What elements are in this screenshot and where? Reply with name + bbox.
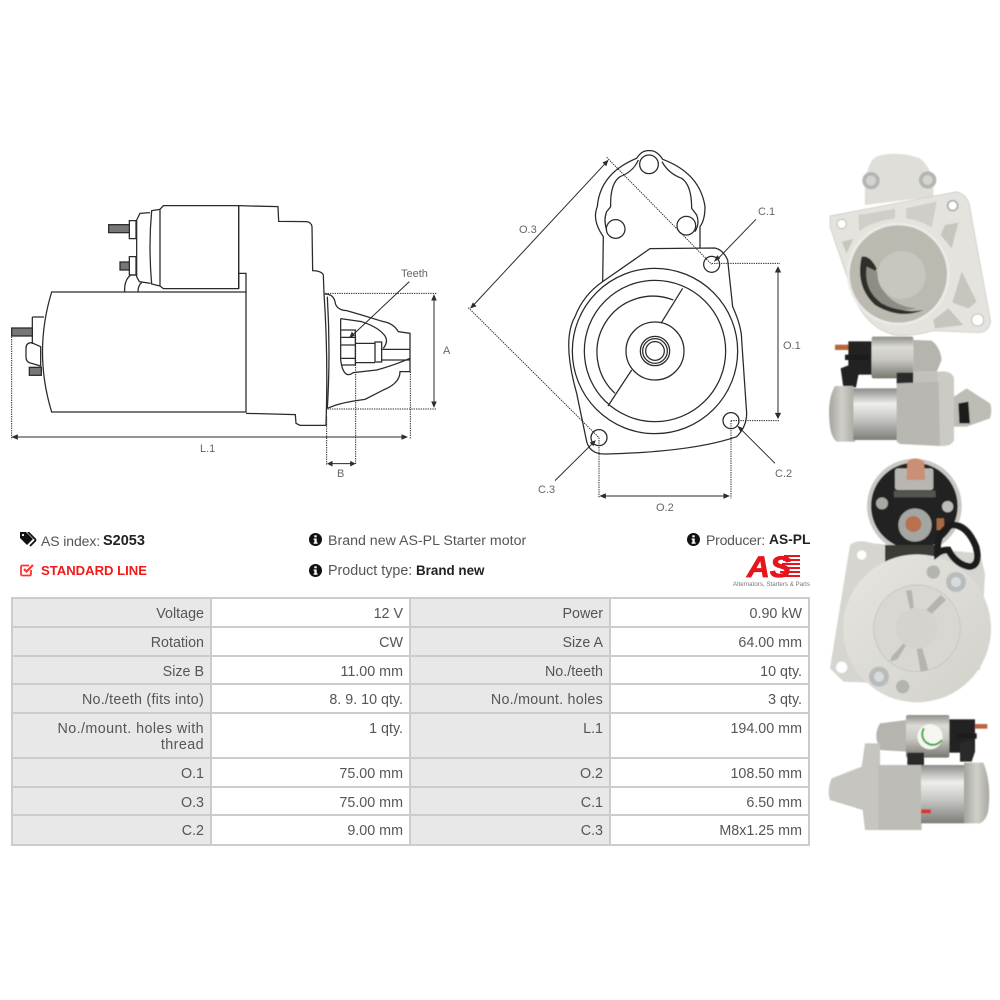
- row: voltage and power: 12 V: [374, 606, 403, 622]
- row: threaded holes and L.1: L.1: [583, 721, 603, 737]
- label: O.2: O.2: [656, 502, 674, 514]
- label: O.3: O.3: [519, 224, 537, 236]
- dimension lines: [468, 157, 780, 498]
- dimension lines: [12, 282, 437, 466]
- label: B: B: [337, 468, 344, 480]
- row: C.2 and C.3: M8x1.25 mm: [719, 823, 802, 839]
- info: AS index: AS index:: [41, 533, 100, 549]
- row: fits into and mounting holes: No./teeth (fits into): [82, 692, 204, 708]
- row: voltage and power: 0.90 kW: [750, 606, 802, 622]
- row: voltage and power: Power: [562, 606, 603, 622]
- row: size B and teeth: No./teeth: [545, 664, 603, 680]
- row: O.3 and C.1: 6.50 mm: [746, 795, 802, 811]
- info: product type: Product type:: [328, 563, 412, 579]
- drive nose: [325, 294, 410, 408]
- mounting flange outline: [569, 151, 747, 454]
- info: product type: [309, 563, 484, 579]
- icon: info: [309, 533, 322, 546]
- row: size B and teeth: [13, 657, 808, 683]
- row: size B and teeth: 10 qty.: [760, 664, 802, 680]
- row: threaded holes and L.1: 194.00 mm: [730, 721, 802, 737]
- row: threaded holes and L.1: [13, 714, 808, 757]
- specification table: [11, 597, 810, 846]
- row: O.1 and O.2: 75.00 mm: [339, 766, 403, 782]
- side view technical drawing: [11, 205, 451, 480]
- row: O.1 and O.2: O.1: [181, 766, 204, 782]
- drive end rings and pinion: [572, 268, 738, 434]
- row: threaded holes and L.1: 1 qty.: [369, 721, 403, 737]
- front view technical drawing: [468, 150, 801, 514]
- row: rotation and size A: 64.00 mm: [738, 635, 802, 651]
- info: product description: Brand new AS-PL Starter motor: [328, 533, 526, 549]
- row: rotation and size A: CW: [379, 635, 403, 651]
- info: product type: Brand new: [416, 563, 484, 578]
- row: C.2 and C.3: C.3: [581, 823, 603, 839]
- row: size B and teeth: Size B: [163, 664, 204, 680]
- icon: red check box: [20, 564, 34, 576]
- label: O.1: O.1: [783, 340, 801, 352]
- info: producer: Producer:: [706, 532, 765, 548]
- row: rotation and size A: [13, 628, 808, 655]
- label: C.2: C.2: [775, 468, 792, 480]
- row: threaded holes and L.1: thread: [161, 737, 204, 753]
- logo: AS: [733, 553, 810, 587]
- row: size B and teeth: 11.00 mm: [340, 664, 403, 680]
- row: O.3 and C.1: 75.00 mm: [339, 795, 403, 811]
- icon: info: [687, 533, 700, 546]
- info: AS index: S2053: [103, 533, 145, 549]
- info: producer: [687, 532, 810, 548]
- row: fits into and mounting holes: No./mount. holes: [491, 692, 603, 708]
- row: fits into and mounting holes: 3 qty.: [768, 692, 802, 708]
- solenoid: [125, 206, 239, 292]
- row: threaded holes and L.1: No./mount. holes with: [57, 721, 204, 737]
- row: O.3 and C.1: C.1: [581, 795, 603, 811]
- label: A: A: [443, 345, 451, 357]
- row: rotation and size A: Size A: [562, 635, 603, 651]
- row: O.3 and C.1: [13, 788, 808, 814]
- label: L.1: L.1: [200, 443, 215, 455]
- photos of the starter motor: [828, 154, 992, 830]
- row: C.2 and C.3: [13, 816, 808, 844]
- row: O.3 and C.1: O.3: [181, 795, 204, 811]
- label: C.3: C.3: [538, 484, 555, 496]
- row: C.2 and C.3: 9.00 mm: [347, 823, 403, 839]
- row: fits into and mounting holes: 8. 9. 10 qty.: [329, 692, 403, 708]
- info: AS index: [20, 532, 145, 549]
- row: voltage and power: Voltage: [156, 606, 204, 622]
- photo: mounting flange view: [830, 154, 991, 335]
- row: fits into and mounting holes: [13, 685, 808, 712]
- info: producer: AS-PL: [769, 532, 810, 547]
- label: C.1: C.1: [758, 206, 775, 218]
- icon: info: [309, 564, 322, 577]
- row: O.1 and O.2: O.2: [580, 766, 603, 782]
- row: O.1 and O.2: [13, 759, 808, 786]
- info: standard line: STANDARD LINE: [41, 563, 147, 578]
- row: O.1 and O.2: 108.50 mm: [730, 766, 802, 782]
- photo: rear view with solenoid terminals: [830, 458, 991, 702]
- icon: tags: [20, 532, 36, 547]
- photo: side view with pinion on right: [829, 337, 991, 446]
- photo: side view with pinion on left: [829, 715, 989, 830]
- label: Teeth: Teeth: [401, 268, 428, 280]
- row: rotation and size A: Rotation: [151, 635, 204, 651]
- row: voltage and power: [13, 599, 808, 626]
- motor housing outline: [42, 206, 327, 425]
- terminal studs: [12, 221, 136, 375]
- row: C.2 and C.3: C.2: [182, 823, 204, 839]
